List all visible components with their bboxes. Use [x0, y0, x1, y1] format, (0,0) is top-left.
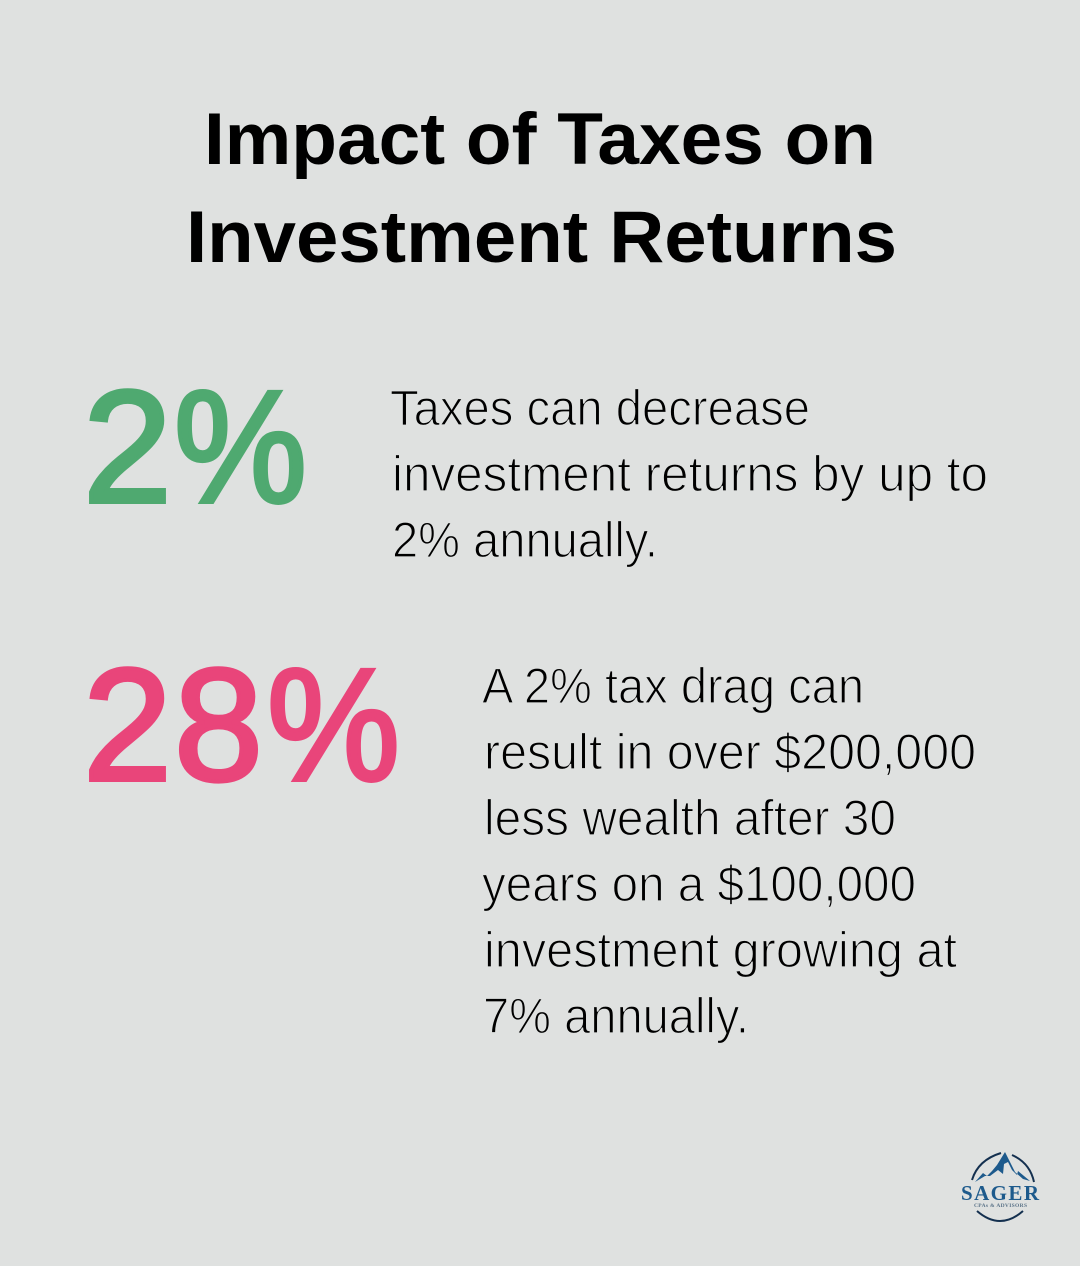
text block: 2% description	[390, 380, 988, 568]
stat number: 28%	[83, 635, 400, 814]
text block: 28% description: 7% annually.	[483, 988, 749, 1044]
text block: 28% description: A 2% tax drag can	[482, 658, 864, 714]
panel: 2% statistic	[83, 357, 988, 568]
text block: 28% description: years on a $100,000	[482, 856, 916, 912]
stat number: 2%: 2	[83, 357, 172, 536]
text block: 2% description: Taxes can decrease	[390, 380, 810, 436]
text block: 28% description: investment growing at	[484, 922, 957, 978]
text block: 28% description	[482, 658, 976, 1044]
text block: 2% description: 2% annually.	[392, 512, 658, 568]
tagline: CPAs & ADVISORS	[974, 1203, 1027, 1209]
title: Impact of Taxes on	[204, 99, 876, 180]
stat number: 2%: %	[174, 357, 307, 536]
stat number: 28%: %	[267, 635, 400, 814]
icon: logo ring arcs	[972, 1153, 1034, 1221]
icon: mountain	[975, 1152, 1030, 1182]
stat number: 28%: 2	[83, 635, 172, 814]
title: Investment Returns	[186, 197, 897, 278]
title	[186, 99, 897, 278]
text block: 2% description: investment returns by up to	[392, 446, 988, 502]
stat number: 28%: 8	[174, 635, 263, 814]
text block: 28% description: result in over $200,000	[484, 724, 976, 780]
stat number: 2%	[83, 357, 307, 536]
panel: 28% statistic	[83, 635, 976, 1044]
text block: 28% description: less wealth after 30	[484, 790, 896, 846]
wordmark: SAGER	[961, 1181, 1040, 1205]
logo: Sager CPAs & Advisors	[961, 1152, 1040, 1221]
